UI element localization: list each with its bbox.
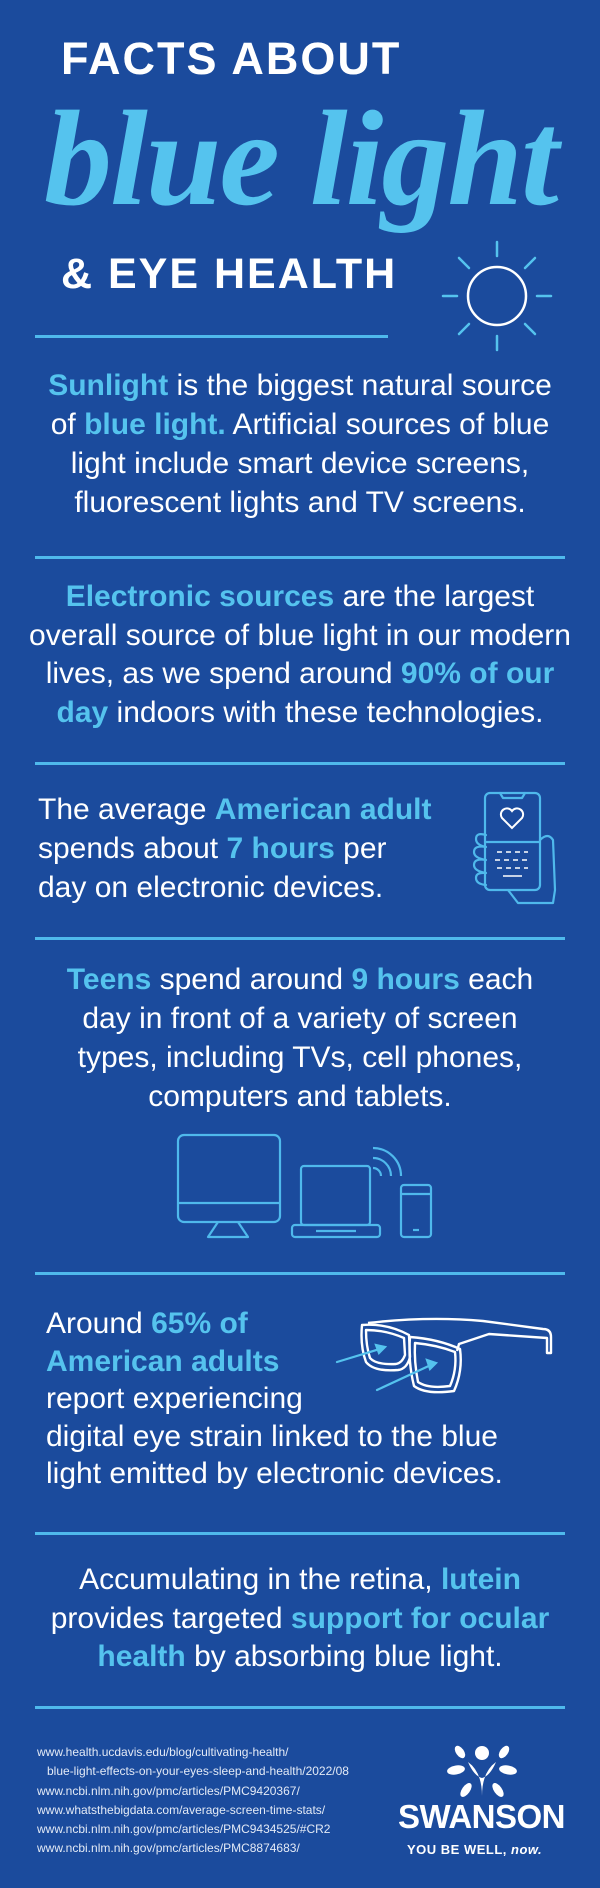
text: teens <box>67 963 533 1113</box>
text: sunlight <box>48 369 552 519</box>
text: electronic sources: day indoors with these technologies. <box>57 696 543 729</box>
text: american adult: spends about 7 hours per <box>38 832 387 865</box>
text: american adult: day on electronic devices. <box>38 871 383 904</box>
text: american adult: The average American adult <box>38 793 432 826</box>
text: 65% adults: light emitted by electronic devices. <box>46 1457 503 1490</box>
text: teens: computers and tablets. <box>148 1080 452 1113</box>
text: sunlight: light include smart device screens, <box>71 447 529 480</box>
title: eye health: & EYE HEALTH <box>61 250 397 298</box>
icon: phone in hand <box>472 792 556 904</box>
logo: swanson <box>398 1746 565 1857</box>
sources list <box>37 1745 349 1855</box>
text: electronic sources: lives, as we spend around 90% of our <box>46 657 554 690</box>
text: electronic sources: Electronic sources are the largest <box>66 580 534 613</box>
text: teens: day in front of a variety of screen <box>82 1002 518 1035</box>
text: teens: Teens spend around 9 hours each <box>67 963 533 996</box>
text: lutein: Accumulating in the retina, lutein <box>79 1563 521 1596</box>
text: lutein: health by absorbing blue light. <box>97 1640 503 1673</box>
text: lutein <box>51 1563 549 1673</box>
title: blue light script: blue light <box>44 84 557 234</box>
icon: devices <box>176 1134 432 1238</box>
text: electronic sources: overall source of blue light in our modern <box>29 619 571 652</box>
sources list: blue-light-effects-on-your-eyes-sleep-and-health/2022/08 <box>47 1764 349 1778</box>
text: 65% adults: Around 65% of <box>46 1307 248 1340</box>
text: teens: types, including TVs, cell phones, <box>78 1041 522 1074</box>
text: 65% adults: digital eye strain linked to the blue <box>46 1420 498 1452</box>
text: electronic sources <box>29 580 571 729</box>
text: 65% adults: American adults <box>46 1344 279 1378</box>
sources list: www.ncbi.nlm.nih.gov/pmc/articles/PMC8874683/ <box>37 1841 300 1855</box>
sources list: www.whatsthebigdata.com/average-screen-time-stats/ <box>37 1803 325 1817</box>
text: 65% adults <box>46 1307 503 1490</box>
icon: sun <box>442 240 552 352</box>
text: lutein: provides targeted support for ocular <box>51 1602 549 1634</box>
text: american adult <box>38 793 432 904</box>
sources list: www.ncbi.nlm.nih.gov/pmc/articles/PMC9420367/ <box>37 1784 300 1798</box>
text: sunlight: fluorescent lights and TV screens. <box>74 486 526 519</box>
sources list: www.health.ucdavis.edu/blog/cultivating-health/ <box>37 1745 288 1759</box>
text: 65% adults: report experiencing <box>46 1382 303 1415</box>
text: sunlight: Sunlight is the biggest natural source <box>48 369 552 402</box>
sources list: www.ncbi.nlm.nih.gov/pmc/articles/PMC9434525/#CR2 <box>37 1822 330 1836</box>
logo wordmark: SWANSON <box>398 1798 565 1835</box>
text: sunlight: of blue light. Artificial sources of blue <box>51 408 549 441</box>
title: facts about: FACTS ABOUT <box>61 33 401 84</box>
icon: glasses with arrows <box>336 1318 552 1394</box>
logo icon <box>447 1746 517 1797</box>
tagline: YOU BE WELL, now. <box>407 1842 542 1857</box>
